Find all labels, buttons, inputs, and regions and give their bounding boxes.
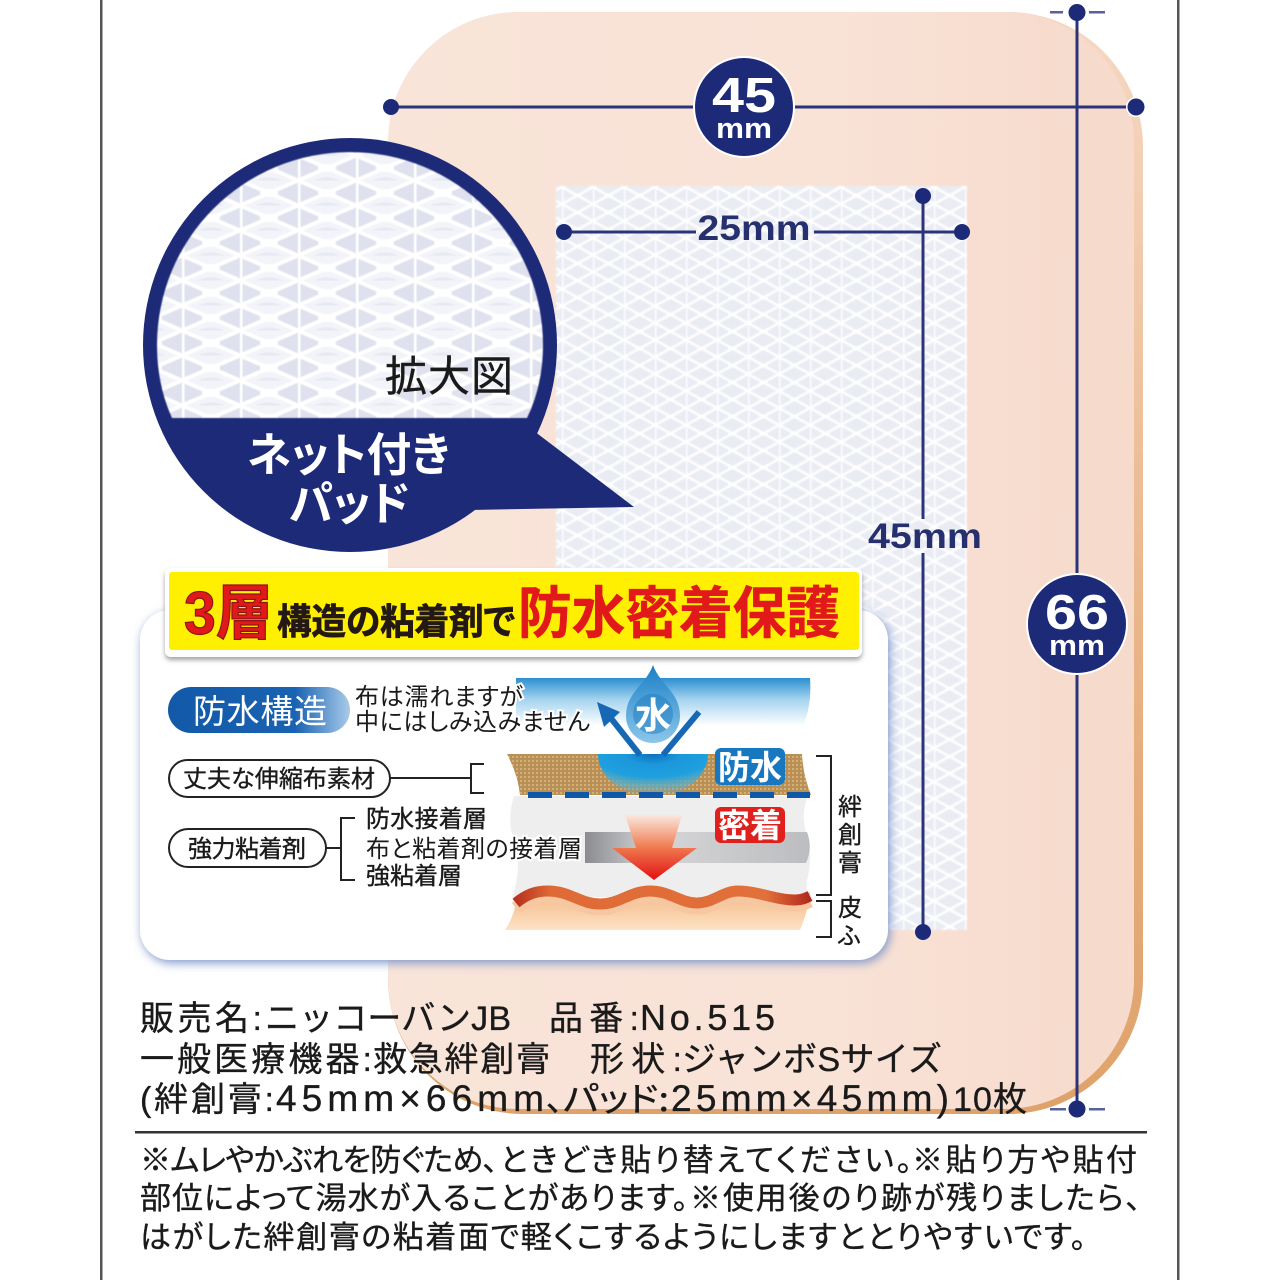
bracket label: bandage: 絆	[838, 787, 862, 822]
yellow headline banner: 3層	[184, 580, 273, 647]
product information: No.515	[640, 997, 775, 1038]
label: strong adhesive: 布と粘着剤の接着層	[366, 829, 582, 864]
dimension: pad width 25mm: 25mm	[698, 209, 810, 248]
usage notes: ※貼り方や貼付	[912, 1135, 1137, 1180]
dimension: bandage width 45mm	[383, 56, 1146, 158]
panel: three layer adhesive structure	[140, 568, 888, 960]
label: strong adhesive: 強粘着層	[366, 856, 462, 891]
bracket label: skin	[816, 888, 862, 951]
product information: 救急絆創膏	[373, 1041, 550, 1079]
dimension: bandage height 66mm	[1026, 4, 1128, 1118]
adhesive grey layers	[510, 796, 810, 897]
magnifier callout: net pad	[143, 138, 634, 552]
label: enlarged view: 拡大図	[385, 343, 513, 404]
yellow headline banner: 防水密着保護	[518, 569, 840, 650]
usage notes	[140, 1135, 1141, 1257]
product information: (絆創膏:	[140, 1081, 274, 1119]
usage notes: 部位によって湯水が入ることがあります。	[140, 1173, 688, 1218]
label: strong adhesive: 防水接着層	[366, 799, 487, 834]
product information: ニッコーバンJB	[265, 1000, 511, 1038]
callout tail	[470, 428, 634, 510]
repel arrows	[597, 702, 699, 755]
label: durable stretch fabric: 丈夫な伸縮布素材	[183, 759, 375, 794]
product information	[140, 997, 1027, 1121]
product information: 販売名:	[140, 1000, 262, 1038]
product information: 一般医療機器:	[140, 1041, 372, 1079]
dimension: bandage width 45mm: mm	[716, 113, 772, 145]
adhesive pad with net texture	[556, 186, 967, 930]
dimension: pad height 45mm	[868, 188, 982, 940]
callout heading	[247, 419, 450, 534]
usage notes: ※ムレやかぶれを防ぐため、	[140, 1135, 498, 1180]
product information: 25mm×45mm)	[671, 1078, 949, 1119]
waterproof dashed line	[528, 792, 810, 798]
product information: ジャンボSサイズ	[682, 1041, 942, 1079]
product information: パッド:	[563, 1072, 669, 1121]
adhesion badge: 密着	[718, 799, 782, 847]
callout heading: ネット付き	[247, 419, 450, 485]
label: strong adhesive	[169, 799, 582, 891]
label: strong adhesive: 強力粘着剤	[188, 829, 306, 864]
water band	[516, 678, 810, 726]
layer diagram	[505, 665, 811, 930]
water drop: 水	[635, 687, 671, 739]
product information: 45mm×66mm	[276, 1078, 544, 1119]
bracket label: skin: 皮	[838, 888, 862, 923]
dimension: pad height 45mm: 45mm	[868, 517, 982, 556]
bandage shape	[388, 12, 1143, 1114]
callout heading: パッド	[289, 468, 410, 534]
bracket label: skin: ふ	[838, 916, 861, 951]
usage notes: はがした絆創膏の粘着面で軽くこするようにしますととりやすいです。	[140, 1212, 1086, 1257]
product information: 品番:	[549, 1000, 639, 1038]
water absorption patch	[598, 754, 708, 796]
yellow headline banner: 構造の粘着剤で	[277, 593, 515, 645]
usage notes: ※使用後のり跡が残りましたら、	[690, 1173, 1141, 1218]
enlarged net texture	[157, 152, 543, 418]
label: durable stretch fabric	[169, 759, 484, 797]
waterproof structure pill: 防水構造	[193, 685, 327, 733]
dimension: bandage height 66mm: 66	[1045, 586, 1109, 640]
waterproof badge: 防水	[718, 741, 782, 789]
product information: 、	[546, 1072, 563, 1121]
divider	[135, 1131, 1147, 1134]
dimension: pad width 25mm	[556, 209, 970, 248]
magnifier ring	[143, 138, 557, 552]
bracket label: bandage	[816, 756, 862, 895]
bracket label: bandage: 膏	[838, 843, 862, 878]
usage notes: ときどき貼り替えてください。	[500, 1135, 912, 1180]
explanation: fabric wet but no penetration: 布は濡れますが	[355, 677, 523, 712]
water drop	[626, 665, 680, 743]
fabric layer	[507, 754, 811, 795]
adhesion arrow	[612, 815, 697, 880]
product information: 形状:	[590, 1041, 682, 1079]
dimension: bandage width 45mm: 45	[712, 69, 776, 123]
dimension: bandage height 66mm: mm	[1049, 630, 1105, 662]
bracket label: bandage: 創	[838, 815, 862, 850]
product information: 10枚	[953, 1081, 1027, 1119]
yellow headline banner	[165, 568, 862, 657]
explanation: fabric wet but no penetration: 中にはしみ込みません	[355, 702, 590, 737]
skin layer	[505, 887, 810, 930]
explanation: fabric wet but no penetration	[355, 677, 590, 737]
